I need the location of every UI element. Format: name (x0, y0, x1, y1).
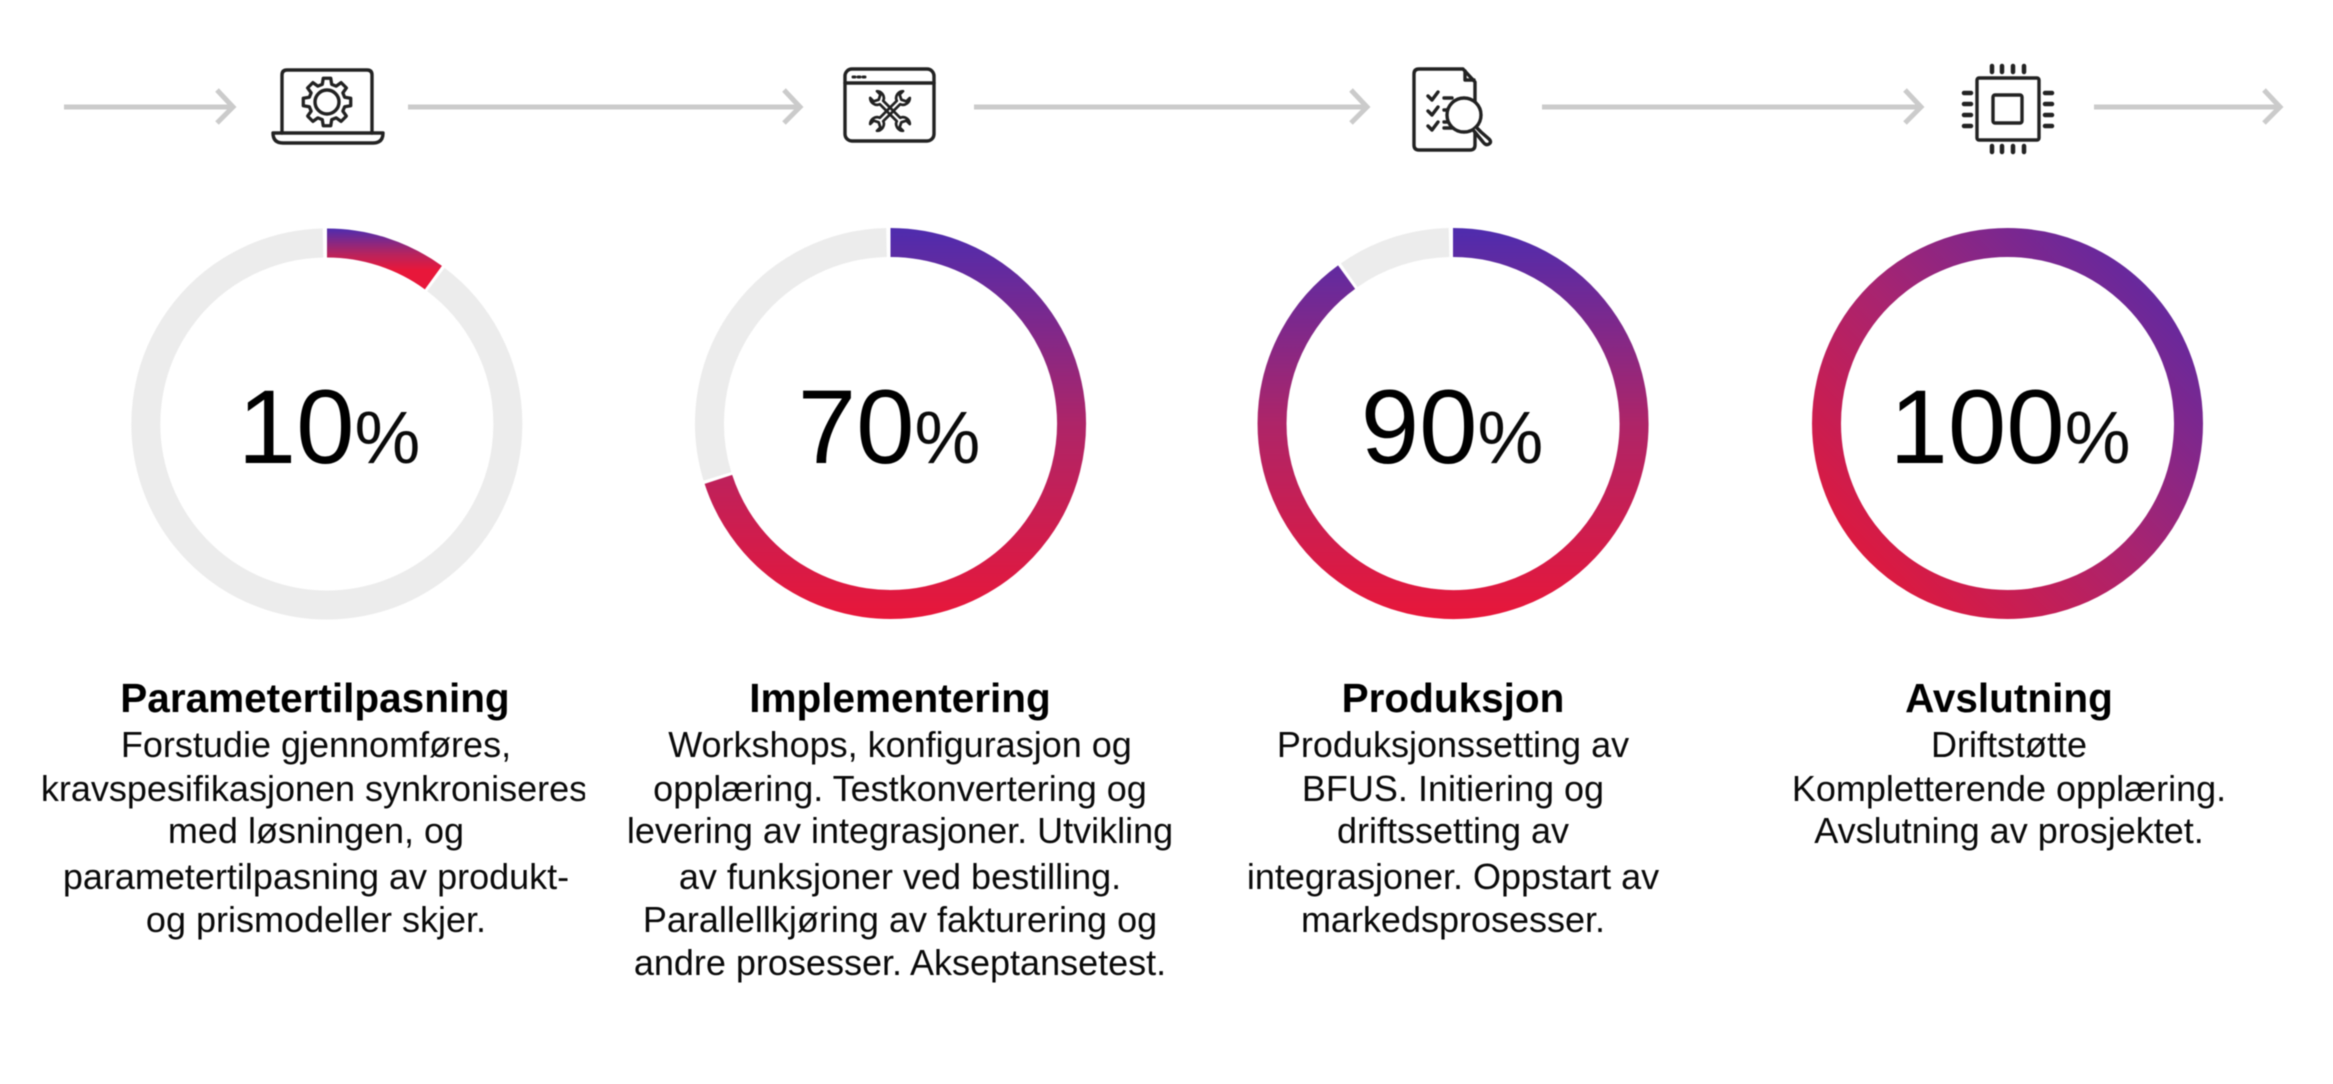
arrow 3 (974, 90, 1367, 123)
donut chart 90% (1272, 242, 1634, 604)
body text (1247, 724, 1659, 940)
process flow arrows (64, 90, 2280, 123)
body text (1792, 724, 2226, 851)
value 10%: 10% (238, 369, 420, 486)
arrow 2 (408, 90, 800, 123)
donut chart 10% (146, 243, 508, 605)
body text: Produksjonssetting av (1277, 724, 1629, 765)
body text: Forstudie gjennomføres, (121, 724, 511, 765)
icon: microchip (1964, 66, 2052, 152)
body text: integrasjoner. Oppstart av (1247, 856, 1659, 897)
panel: Avslutning (1792, 242, 2226, 851)
arrow 5 (2094, 90, 2280, 123)
heading: Produksjon (1342, 675, 1564, 721)
body text: markedsprosesser. (1301, 899, 1605, 940)
donut chart 100% (1826, 242, 2188, 604)
body text: Avslutning av prosjektet. (1814, 810, 2204, 851)
body text: driftssetting av (1337, 810, 1569, 851)
body text: andre prosesser. Akseptansetest. (634, 942, 1166, 983)
body text: og prismodeller skjer. (146, 899, 486, 940)
body text: opplæring. Testkonvertering og (653, 768, 1147, 809)
body text: av funksjoner ved bestilling. (679, 856, 1121, 897)
panel: Produksjon (1247, 242, 1659, 940)
heading: Parametertilpasning (120, 675, 510, 721)
body text: levering av integrasjoner. Utvikling (627, 810, 1173, 851)
icon: laptop with gear (273, 70, 383, 143)
body text: kravspesifikasjonen synkroniseres (41, 768, 587, 809)
heading: Implementering (749, 675, 1051, 721)
body text: BFUS. Initiering og (1302, 768, 1604, 809)
value 70%: 70% (798, 369, 980, 486)
body text (41, 724, 587, 940)
body text (627, 724, 1173, 983)
body text: med løsningen, og (168, 810, 464, 851)
body text: parametertilpasning av produkt- (63, 856, 569, 897)
panel: Implementering (627, 242, 1173, 983)
value 90%: 90% (1361, 369, 1543, 486)
donut chart 70% (709, 242, 1072, 604)
body text: Workshops, konfigurasjon og (668, 724, 1132, 765)
icon: browser window with crossed wrenches (845, 69, 934, 141)
body text: Parallellkjøring av fakturering og (643, 899, 1157, 940)
body text: Kompletterende opplæring. (1792, 768, 2226, 809)
value 100%: 100% (1889, 369, 2131, 486)
panel: Parametertilpasning (41, 243, 587, 940)
heading: Avslutning (1905, 675, 2113, 721)
body text: Driftstøtte (1931, 724, 2087, 765)
icon: document checklist with magnifier (1414, 69, 1490, 150)
arrow 1 (64, 90, 233, 123)
arrow 4 (1542, 90, 1921, 123)
